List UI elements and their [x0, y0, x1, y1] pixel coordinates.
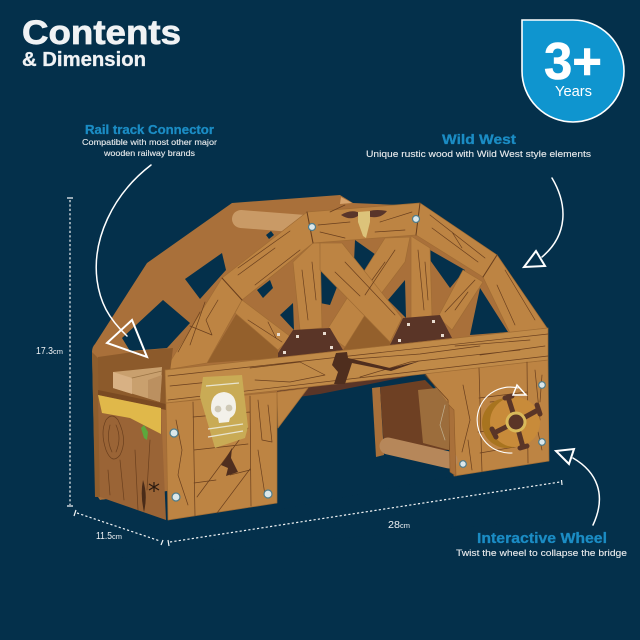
top chord right lower — [483, 255, 547, 333]
downward diagonal — [320, 243, 402, 342]
wheel spokes — [492, 396, 540, 448]
main beam — [165, 328, 548, 403]
dimension: height: 17.3 — [36, 345, 53, 357]
lower left diagonal — [235, 300, 291, 350]
right vertical post — [411, 236, 432, 318]
upward diagonal — [327, 237, 410, 347]
chord joints — [222, 203, 497, 300]
dimension: height — [36, 198, 73, 506]
right leg planks and grain — [425, 362, 542, 472]
crack — [221, 448, 238, 476]
shaded inner panels — [207, 313, 392, 363]
dimension: length — [168, 480, 562, 546]
dimension: length: cm — [400, 523, 410, 530]
callout: wild west — [366, 131, 591, 159]
iron plate right — [390, 315, 452, 345]
bridge underside shadow — [277, 371, 425, 400]
side panel — [98, 395, 166, 520]
navy opening under beam — [277, 373, 454, 510]
track block — [113, 367, 162, 402]
iron plate left — [278, 328, 343, 358]
rear dowel tip — [340, 197, 352, 204]
callout: wild west: Wild West — [442, 131, 516, 147]
left vertical post — [293, 243, 322, 330]
callout: rail track connector: wooden railway brands — [103, 148, 195, 158]
age badge: 3+ — [544, 33, 602, 91]
bridge toy — [92, 195, 549, 560]
left leg — [166, 392, 277, 520]
left box interior — [98, 348, 173, 405]
dimension: depth — [74, 510, 163, 545]
callout: interactive wheel: Twist the wheel to collapse the bridge — [456, 548, 627, 559]
screws — [170, 216, 545, 501]
top chord right upper — [416, 203, 497, 277]
right diagonal — [438, 270, 483, 330]
left brace — [277, 388, 308, 428]
dimension: length: 28 — [388, 519, 400, 531]
opening interior — [372, 380, 456, 476]
top chord centre — [307, 203, 420, 243]
dimension: height: cm — [53, 349, 63, 356]
callout: rail track connector — [82, 122, 217, 158]
callout: rail track connector: Compatible with most other major — [82, 137, 217, 147]
truss wood grain — [178, 205, 535, 352]
top chord left upper — [222, 212, 313, 300]
title: Contents — [22, 14, 181, 52]
yellow sand band — [98, 395, 161, 434]
callout: interactive wheel — [456, 530, 627, 559]
callout: rail track connector: Rail track Connector — [85, 122, 214, 137]
interactive wheel — [482, 396, 540, 448]
title: & Dimension — [22, 49, 146, 71]
wanted poster — [200, 375, 248, 448]
callout: wild west: Unique rustic wood with Wild West style elements — [366, 149, 591, 159]
back panel with windows — [92, 195, 548, 500]
plate rivets — [277, 320, 444, 354]
skull — [211, 392, 236, 423]
arrow: wheel rotation arc — [477, 385, 526, 453]
lower dowel — [388, 446, 449, 460]
steer skull ornament — [341, 210, 387, 238]
arrow: interactive wheel — [556, 449, 599, 525]
beam grain and crack — [168, 334, 548, 400]
arrow: wild west — [524, 178, 563, 267]
left edge strip — [92, 352, 100, 497]
dimension: depth: cm — [112, 534, 122, 541]
left leg planks and grain — [176, 396, 272, 516]
age badge — [522, 20, 624, 122]
right leg — [425, 360, 549, 476]
side panel details — [103, 416, 159, 512]
ledge — [98, 390, 166, 410]
truss members — [165, 203, 547, 370]
top chord left lower — [165, 278, 242, 370]
top dowel — [241, 219, 305, 224]
age badge: Years — [555, 83, 592, 100]
dimension: depth: 11.5 — [96, 530, 112, 542]
callout: interactive wheel: Interactive Wheel — [477, 530, 607, 547]
arrow: rail track connector — [96, 165, 151, 357]
title — [22, 14, 181, 71]
navy gap under bridge — [94, 445, 548, 560]
